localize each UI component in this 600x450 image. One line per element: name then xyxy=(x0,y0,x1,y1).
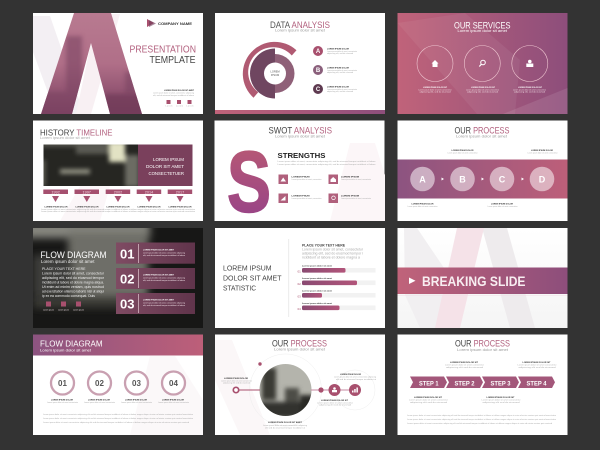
timeline year 2002 xyxy=(106,190,130,202)
upper captions: Lorem ipsum dolor sit amet consectetur xyxy=(518,364,557,366)
lower captions: Lorem ipsum dolor sit amet consectetur xyxy=(488,205,518,208)
small icons: Lorem ipsum xyxy=(58,308,69,312)
strengths heading: STRENGTHS xyxy=(278,151,326,160)
body text: adipiscing elit, sed do eiusmod tempor xyxy=(42,276,105,280)
panel: presentation template cover xyxy=(33,13,203,116)
cover caption: Lorem ipsum dolor sit amet, consectetur adipiscing xyxy=(153,92,195,94)
logo and company name: COMPANY NAME xyxy=(158,21,192,26)
item A: A xyxy=(316,49,321,55)
item B: B xyxy=(316,68,321,74)
body paragraph: Lorem ipsum dolor sit amet consectetur adipiscing elit sed do eiusmod tempor incididunt ut labore et dolore magna aliqua ut enim ad minim veniam quis nostrud xyxy=(43,421,190,424)
heading: OUR PROCESS xyxy=(272,338,327,348)
bar 01: Lorem ipsum dolor sit amet xyxy=(302,264,332,268)
photo caption panel: CONSECTETUER xyxy=(148,171,184,177)
timeline year 2017: 2017 xyxy=(176,190,184,194)
photo caption panel: DOLOR SIT AMET xyxy=(146,164,184,170)
cover title xyxy=(130,44,196,66)
upper captions: adipiscing elit sed do eiusmod xyxy=(518,366,557,369)
panel: breaking slide xyxy=(398,228,568,328)
timeline year 2014 xyxy=(137,190,161,202)
bar 03: 03 xyxy=(298,294,301,298)
lower captions: adipiscing elit sed do eiusmod xyxy=(410,401,448,404)
lower captions xyxy=(408,204,518,208)
subheading: Lorem ipsum dolor sit amet xyxy=(41,259,95,264)
timeline captions: LOREM IPSUM DOLOR xyxy=(106,206,130,208)
flow box 02 xyxy=(116,268,195,289)
item B xyxy=(313,65,357,75)
panel: statistic bars xyxy=(215,228,385,328)
left node with connector: LOREM IPSUM DOLOR xyxy=(224,378,249,380)
arrow A to B xyxy=(442,178,444,180)
cover caption xyxy=(153,89,195,97)
panel: flow diagram dark xyxy=(25,222,203,328)
orbit rings xyxy=(250,354,375,426)
cover caption: elit, sed do eiusmod tempor incididunt ut labore xyxy=(153,94,195,97)
upper captions: Lorem ipsum dolor sit amet consectetur xyxy=(528,152,558,154)
lower middle caption: LOREM IPSUM DOLOR SIT xyxy=(321,400,349,402)
timeline captions: LOREM IPSUM DOLOR xyxy=(168,206,192,208)
lower captions: Lorem ipsum dolor sit amet consectetur xyxy=(482,398,521,402)
upper captions: LOREM IPSUM DOLOR SIT xyxy=(450,362,479,364)
item A: LOREM IPSUM DOLOR xyxy=(327,48,349,50)
body paragraph: Lorem ipsum dolor sit amet consectetur adipiscing elit sed do eiusmod tempor incididunt ut labore et dolore magna aliqua ut enim ad minim veniam quis nostrud exercitation xyxy=(43,417,194,420)
heading: DATA ANALYSIS xyxy=(270,20,330,30)
step 2 chevron xyxy=(446,376,483,388)
flow box 03: 03 xyxy=(120,296,134,312)
step 1 chevron: STEP 1 xyxy=(419,380,439,387)
flow box 01: Lorem ipsum dolor sit amet, consectetur adipiscing xyxy=(143,252,186,254)
subheading: Lorem ipsum dolor sit amet xyxy=(275,134,325,138)
bar chart text: ncididunt ut labore et dolore magna a xyxy=(302,256,360,260)
bar chart text: PLACE YOUR TEXT HERE xyxy=(302,244,346,248)
service: person xyxy=(512,46,548,94)
body paragraph: Lorem ipsum dolor sit amet consectetur adipiscing elit sed do eiusmod tempor incididunt ut labore et dolore magna aliqua ut enim ad minim veniam quis nostrud exercitation xyxy=(43,413,194,416)
cover icons: Lorem xyxy=(186,104,194,108)
cover icons xyxy=(166,100,194,108)
circle 03 xyxy=(121,372,152,404)
right upper caption xyxy=(334,374,377,381)
item B: LOREM IPSUM DOLOR xyxy=(327,68,349,70)
service: search: Lorem ipsum dolor sit amet consectetur xyxy=(466,88,499,92)
body paragraph: Lorem ipsum dolor sit amet consectetur adipiscing elit sed do eiusmod tempor incididunt ut labore et dolore magna aliqua ut enim ad minim veniam quis nostrud exercitation xyxy=(407,418,557,421)
subheading: Lorem ipsum dolor sit amet xyxy=(458,29,508,33)
lower captions: LOREM IPSUM DOLOR xyxy=(412,204,434,206)
body paragraph: Lorem ipsum dolor sit amet consectetur adipiscing elit sed do eiusmod tempor incididunt ut labore et dolore magna aliqua ut enim ad minim veniam quis nostrud exercitation xyxy=(407,414,557,417)
service: home xyxy=(417,46,453,94)
heading: OUR PROCESS xyxy=(455,338,510,348)
body text: Lorem ipsum dolor sit amet, consectetur xyxy=(42,272,105,276)
small icons: Lorem ipsum xyxy=(43,308,54,312)
left node with connector: adipiscing elit sed do eiusmod xyxy=(223,382,251,384)
donut chart: IPSUM xyxy=(271,73,279,77)
heading: OUR PROCESS xyxy=(454,126,510,136)
item A: Lorem ipsum dolor sit amet, consectetur xyxy=(327,50,357,53)
bar 02: 02 xyxy=(298,282,301,286)
flow box 02: 02 xyxy=(120,272,134,286)
bottom caption: LOREM IPSUM DOLOR SIT AMET xyxy=(268,421,303,424)
timeline year 1992 xyxy=(43,190,68,202)
bottom caption: elit sed do eiusmod tempor incididunt ut xyxy=(265,426,305,430)
heading: OUR SERVICES xyxy=(454,20,510,30)
photo caption panel xyxy=(138,144,192,186)
upper captions xyxy=(448,150,558,154)
upper captions xyxy=(445,362,557,369)
item C: LOREM IPSUM DOLOR xyxy=(327,86,349,88)
timeline captions: Lorem ipsum dolor sit amet consectetur adipiscing elit sed do eiusmod tempor incididunt ut labore et dolore magna aliqua ut enim ad minim veniam quis nostrud exercitation xyxy=(41,210,196,213)
step 2 chevron: STEP 2 xyxy=(454,380,475,387)
timeline captions: LOREM IPSUM DOLOR xyxy=(76,206,99,208)
lower middle caption: adipiscing elit sed do eiusmod xyxy=(319,404,352,406)
blurred photo xyxy=(44,144,138,186)
play arrow xyxy=(409,278,416,284)
strength item 4: LOREM IPSUM xyxy=(341,196,359,198)
body text: ip ex ea commodo consequat. Duis xyxy=(42,294,95,298)
body text: incididunt ut labore et dolore magna aliqua. xyxy=(42,280,104,284)
timeline captions: LOREM IPSUM DOLOR xyxy=(138,206,161,208)
bar 04 xyxy=(298,302,376,311)
bottom caption: Lorem ipsum dolor sit amet consectetur adipiscing xyxy=(263,424,308,427)
service: search xyxy=(464,46,500,94)
item C: C xyxy=(316,87,321,93)
donut chart xyxy=(243,42,296,98)
flow box 03 xyxy=(116,293,195,314)
gradient band xyxy=(398,268,568,294)
subheading: Lorem ipsum dolor sit amet xyxy=(456,134,508,138)
flow box 02: elit, sed do eiusmod tempor incididunt ut labore xyxy=(143,279,186,282)
upper captions: LOREM IPSUM DOLOR SIT xyxy=(522,362,551,364)
circle 02: LOREM IPSUM DOLOR xyxy=(88,400,110,402)
item A xyxy=(313,46,357,56)
cover title: PRESENTATION xyxy=(130,44,196,56)
bar 02 xyxy=(298,277,376,286)
bar chart text xyxy=(302,244,364,260)
step 1 chevron xyxy=(410,376,447,388)
item C: Lorem ipsum dolor sit amet, consectetur xyxy=(327,88,357,91)
large letter A photo shape xyxy=(40,13,145,116)
service: home: Lorem ipsum dolor sit amet consectetur xyxy=(418,88,452,92)
panel: history timeline xyxy=(33,120,203,221)
strengths text: Lorem ipsum dolor sit amet, consectetur adipiscing elit, sed do eiusmod tempor incididunt ut labore xyxy=(278,160,376,163)
body text: ad exercitation ullamco laboris nisi ut aliqui xyxy=(42,290,104,294)
body paragraph xyxy=(43,413,194,424)
circle 04: LOREM IPSUM DOLOR xyxy=(162,400,184,402)
circle 01: Lorem ipsum dolor sit amet consectetur xyxy=(47,401,78,404)
timeline year 1997: 1997 xyxy=(82,190,91,194)
circle 02 xyxy=(84,372,115,404)
strength item 3: Lorem ipsum dolor sit amet, consectetur xyxy=(341,178,371,181)
panel: SWOT analysis xyxy=(214,120,385,230)
upper captions: LOREM IPSUM DOLOR xyxy=(531,150,553,152)
footer bar xyxy=(215,110,385,114)
item B: adipiscing elit, sed do eiusmod xyxy=(327,71,354,74)
subheading: Lorem ipsum dolor sit amet xyxy=(40,348,92,352)
right upper caption: elit sed do eiusmod tempor incididunt ut xyxy=(336,378,376,381)
timeline captions xyxy=(41,206,196,213)
item C: adipiscing elit, sed do eiusmod xyxy=(327,90,354,93)
service: person: Lorem ipsum dolor sit amet consectetur xyxy=(513,88,546,92)
bar 04: 04 xyxy=(298,307,301,311)
strength item 2: Lorem ipsum dolor sit amet, consectetur xyxy=(292,197,322,200)
subheading: Lorem ipsum dolor sit amet xyxy=(40,136,91,140)
panel: our process band xyxy=(398,120,568,221)
donut chart: LOREM xyxy=(270,70,280,74)
step D xyxy=(530,167,554,191)
circle 04: 04 xyxy=(169,379,178,388)
service: search: LOREM IPSUM DOLOR SIT xyxy=(471,87,496,89)
step C xyxy=(490,167,514,191)
body text: PLACE YOUR TEXT HERE xyxy=(42,267,86,271)
panel: data analysis xyxy=(215,13,385,114)
small icons xyxy=(43,302,84,312)
flow box 02: Lorem ipsum dolor sit amet, consectetur adipiscing xyxy=(143,276,186,280)
strengths text: Lorem ipsum dolor sit amet, consectetur adipiscing elit, sed do eiusmod tempor incididunt ut labore xyxy=(278,163,376,166)
large letter S: S xyxy=(227,134,271,230)
strength item 2 xyxy=(278,194,322,203)
circle 02: Lorem ipsum dolor sit amet consectetur xyxy=(84,401,115,404)
chart icon node xyxy=(349,384,361,396)
strength item 4 xyxy=(328,194,371,203)
strength item 1 xyxy=(278,174,322,184)
timeline year 2014: 2014 xyxy=(145,190,153,194)
lower captions xyxy=(409,397,521,404)
body paragraph xyxy=(407,414,557,425)
bar chart text: Lorem ipsum dolor sit amet, consectetur xyxy=(302,248,364,252)
flow box 02: LOREM IPSUM DOLOR SIT AMET xyxy=(143,274,175,276)
heading: FLOW DIAGRAM xyxy=(40,250,106,260)
panel: our services xyxy=(398,13,568,114)
person icon node xyxy=(328,384,340,396)
logo and company name xyxy=(147,19,192,27)
gradient band xyxy=(398,160,568,198)
step 3 chevron xyxy=(482,376,519,388)
right connector and small dot xyxy=(311,387,355,393)
bar 01: 01 xyxy=(298,270,301,274)
statistic title: LOREM IPSUM xyxy=(223,264,272,272)
bar chart text: adipiscing elit, sed do eiusmod tempor i xyxy=(302,252,363,256)
upper captions: LOREM IPSUM DOLOR xyxy=(452,150,474,152)
lower middle caption: Lorem ipsum dolor sit amet consectetur xyxy=(317,402,353,404)
upper captions: adipiscing elit sed do eiusmod xyxy=(446,366,484,369)
circle 04: Lorem ipsum dolor sit amet consectetur xyxy=(158,401,189,404)
lower captions: LOREM IPSUM DOLOR SIT xyxy=(414,397,443,399)
flow box 03: Lorem ipsum dolor sit amet, consectetur adipiscing xyxy=(143,302,186,304)
bottom caption xyxy=(263,421,308,430)
flow box 01: LOREM IPSUM DOLOR SIT AMET xyxy=(143,248,175,252)
subheading: Lorem ipsum dolor sit amet xyxy=(457,348,509,352)
header band xyxy=(33,334,203,356)
strengths text xyxy=(278,160,376,166)
step 3 chevron: STEP 3 xyxy=(490,380,511,387)
left node with connector: Lorem ipsum dolor sit amet consectetur xyxy=(221,380,252,382)
step B: B xyxy=(459,174,466,184)
cover icons: Lorem xyxy=(166,104,173,108)
upper captions: Lorem ipsum dolor sit amet consectetur xyxy=(445,364,484,366)
step 4 chevron xyxy=(518,376,555,388)
timeline year 2002: 2002 xyxy=(114,190,122,194)
service: person: LOREM IPSUM DOLOR SIT xyxy=(518,87,543,89)
upper captions: Lorem ipsum dolor sit amet consectetur xyxy=(448,152,478,154)
circular photo xyxy=(260,364,312,416)
body text: Ut enim ad minim veniam, quis nostrud xyxy=(42,285,104,289)
timeline captions: LOREM IPSUM DOLOR xyxy=(44,206,68,208)
circle 01 xyxy=(47,372,78,404)
heading: SWOT ANALYSIS xyxy=(268,126,332,136)
service: home: LOREM IPSUM DOLOR SIT xyxy=(423,87,448,89)
statistic title xyxy=(223,264,282,292)
cover icons: Lorem xyxy=(176,104,183,108)
statistic title: DOLOR SIT AMET xyxy=(223,274,282,282)
statistic title: STATISTIC xyxy=(223,284,256,292)
step 4 chevron: STEP 4 xyxy=(526,380,547,387)
small icons: Lorem ipsum xyxy=(73,308,84,312)
strength item 1: Lorem ipsum dolor sit amet, consectetur xyxy=(292,178,322,181)
breaking slide title: BREAKING SLIDE xyxy=(422,273,526,289)
strength item 3 xyxy=(328,174,371,184)
flow box 03: LOREM IPSUM DOLOR SIT AMET xyxy=(143,298,175,302)
circle 01: 01 xyxy=(58,379,67,388)
bar 03 xyxy=(298,290,376,298)
timeline year 1997 xyxy=(74,190,99,202)
circle 03: LOREM IPSUM DOLOR xyxy=(125,400,147,402)
strength item 1: LOREM IPSUM xyxy=(292,176,310,178)
subheading: Lorem ipsum dolor sit amet xyxy=(274,348,326,352)
service: home: adipiscing elit, sed do eiusmod xyxy=(420,90,451,94)
lower captions: Lorem ipsum dolor sit amet consectetur xyxy=(408,205,438,208)
arrow C to D xyxy=(522,178,524,180)
panel: our process radial xyxy=(215,334,385,435)
body paragraph: Lorem ipsum dolor sit amet consectetur adipiscing elit sed do eiusmod tempor incididunt ut labore et dolore magna aliqua ut enim ad minim veniam quis nostrud xyxy=(407,422,553,425)
item B: Lorem ipsum dolor sit amet, consectetur xyxy=(327,69,357,72)
service: search: adipiscing elit, sed do eiusmod xyxy=(467,90,499,94)
lower captions: Lorem ipsum dolor sit amet consectetur xyxy=(409,398,448,402)
strength item 2: LOREM IPSUM xyxy=(292,196,310,198)
step A xyxy=(410,167,435,191)
right upper caption: LOREM IPSUM DOLOR xyxy=(340,374,361,376)
step A: A xyxy=(419,174,426,184)
subheading: Lorem ipsum dolor sit amet xyxy=(275,28,325,32)
step D: D xyxy=(539,174,546,184)
flow box 01: elit, sed do eiusmod tempor incididunt ut labore xyxy=(143,254,186,257)
panel: flow diagram circles xyxy=(33,334,203,435)
strength item 3: LOREM IPSUM xyxy=(341,176,359,178)
circle 02: 02 xyxy=(95,379,104,388)
item A: adipiscing elit, sed do eiusmod xyxy=(327,52,354,55)
circle 03: 03 xyxy=(132,379,141,388)
right upper caption: Lorem ipsum dolor sit amet consectetur adipiscing xyxy=(334,376,377,378)
flow box 03: elit, sed do eiusmod tempor incididunt ut labore xyxy=(143,304,186,307)
body text xyxy=(42,267,105,298)
bar 03: Lorem ipsum dolor sit amet xyxy=(302,290,332,292)
left node with connector xyxy=(221,378,260,393)
step B xyxy=(450,167,475,191)
heading: FLOW DIAGRAM xyxy=(40,338,102,348)
lower captions: adipiscing elit sed do eiusmod xyxy=(482,401,521,404)
arrow B to C xyxy=(482,178,484,180)
circle 03: Lorem ipsum dolor sit amet consectetur xyxy=(121,401,152,404)
timeline captions: Lorem ipsum dolor sit amet consectetur adipiscing elit sed do eiusmod tempor incididunt ut labore et dolore magna aliqua ut enim ad minim veniam quis nostrud exercitation xyxy=(41,208,196,211)
photo caption panel: LOREM IPSUM xyxy=(153,157,184,163)
flow box 01: 01 xyxy=(120,246,134,262)
cover caption: LOREM IPSUM DOLOR SIT AMET xyxy=(164,89,195,92)
item C xyxy=(313,84,357,94)
strength item 4: Lorem ipsum dolor sit amet, consectetur xyxy=(341,197,371,200)
panel: our process steps xyxy=(398,334,568,435)
lower captions: LOREM IPSUM DOLOR xyxy=(491,204,513,206)
circle 01: LOREM IPSUM DOLOR xyxy=(51,400,73,402)
top orbit dot xyxy=(258,362,262,366)
service: person: adipiscing elit, sed do eiusmod xyxy=(514,90,546,94)
heading: HISTORY TIMELINE xyxy=(40,128,113,138)
lower captions: LOREM IPSUM DOLOR SIT xyxy=(486,397,515,399)
bar 02: Lorem ipsum dolor sit amet xyxy=(302,277,332,280)
flow box 01 xyxy=(116,242,195,264)
cover title: TEMPLATE xyxy=(150,54,196,66)
bar 01 xyxy=(298,264,376,274)
lower middle caption xyxy=(317,400,353,406)
circle 04 xyxy=(158,372,189,404)
bar 04: Lorem ipsum dolor sit amet xyxy=(302,302,332,305)
timeline year 2017 xyxy=(168,190,192,202)
timeline year 1992: 1992 xyxy=(51,190,60,194)
step C: C xyxy=(499,174,506,184)
